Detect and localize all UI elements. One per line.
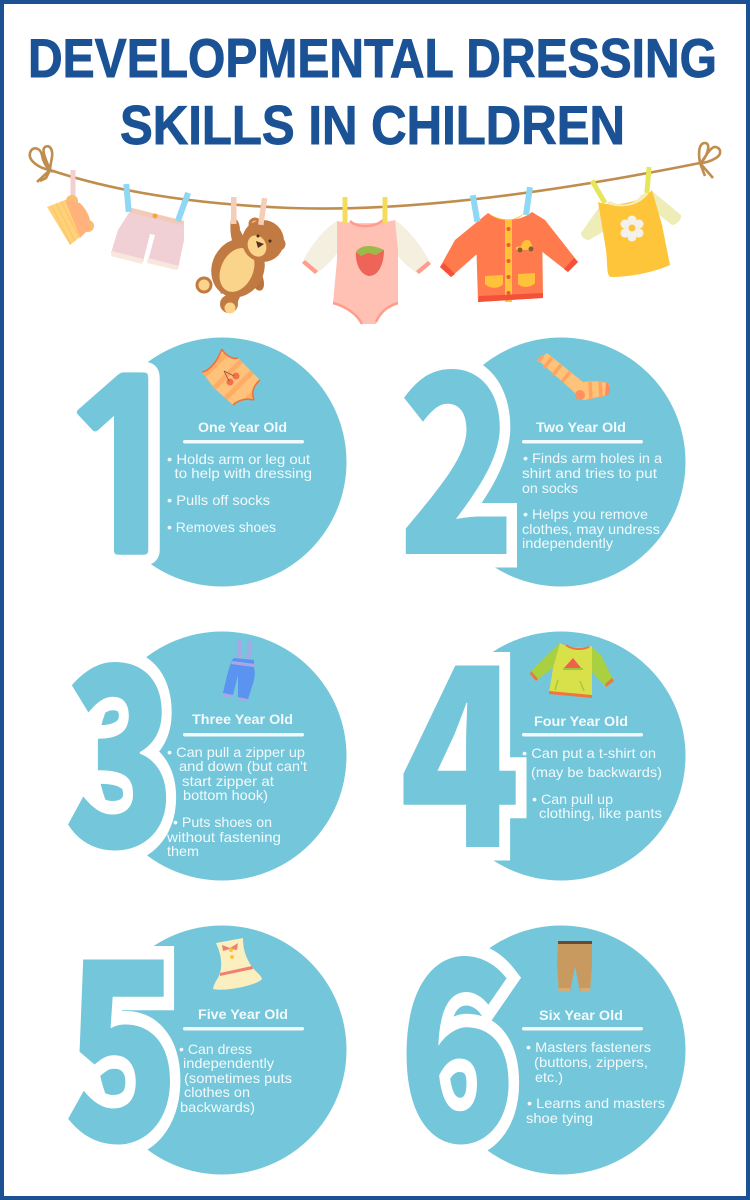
icon: cherry onesie [202, 348, 260, 406]
age heading: Four Year Old [534, 713, 628, 729]
skills list: clothes on [184, 1084, 250, 1100]
skills list: clothing, like pants [539, 805, 662, 821]
skills list: • Helps you remove [523, 506, 648, 522]
skills list: shoe tying [526, 1110, 593, 1126]
strawberry onesie [302, 197, 431, 324]
panel: three year old [64, 558, 346, 920]
skills list: independently [522, 535, 613, 551]
divider [183, 1027, 304, 1030]
skills list [526, 1039, 665, 1126]
title: SKILLS IN CHILDREN [120, 94, 625, 156]
right knot [699, 143, 720, 178]
skills list: shirt and tries to put [522, 465, 657, 481]
skills list: without fastening [166, 829, 281, 845]
skills list [522, 745, 662, 821]
age heading: One Year Old [198, 419, 287, 435]
skills list: • Puts shoes on [173, 814, 272, 830]
skills list [166, 744, 307, 859]
skills list: clothes, may undress [522, 521, 660, 537]
title [28, 27, 717, 156]
skills list: • Can dress [179, 1041, 252, 1057]
skills list: • Holds arm or leg out [167, 451, 310, 467]
divider [522, 733, 643, 736]
skills list: • Masters fasteners [526, 1039, 651, 1055]
skills list: on socks [522, 480, 578, 496]
age heading: Three Year Old [192, 711, 293, 727]
rope [50, 163, 700, 209]
skills list: • Can pull a zipper up [167, 744, 305, 760]
panel: six year old [398, 851, 686, 1200]
icon: watermelon sweatshirt [530, 643, 614, 698]
skills list: • Learns and masters [527, 1095, 665, 1111]
skills list: to help with dressing [174, 465, 312, 481]
number 2: 2 [398, 264, 516, 626]
skills list: • Removes shoes [167, 519, 276, 535]
skills list: bottom hook) [183, 787, 268, 803]
skills list: • Finds arm holes in a [523, 450, 662, 466]
skills list: (may be backwards) [531, 764, 662, 780]
skills list: etc.) [535, 1069, 563, 1085]
skills list: • Pulls off socks [167, 492, 270, 508]
clothesline illustration [30, 143, 720, 324]
skills list: them [167, 843, 199, 859]
skills list: • Can put a t-shirt on [522, 745, 656, 761]
orange cardigan [440, 187, 578, 302]
skills list: • Can pull up [532, 791, 613, 807]
skills list [167, 451, 312, 535]
panel: five year old [63, 852, 346, 1200]
shorts [111, 184, 191, 270]
hat [47, 170, 94, 247]
left knot [30, 146, 52, 182]
skills list: start zipper at [182, 773, 274, 789]
teddy bear [196, 197, 286, 314]
divider [183, 440, 304, 444]
icon: brown pants [557, 941, 592, 992]
panel: two year old [398, 264, 686, 626]
number 1: 1 [50, 353, 202, 588]
age heading: Five Year Old [198, 1006, 288, 1022]
panel: four year old [399, 558, 686, 920]
skills list [179, 1041, 292, 1115]
divider [183, 733, 304, 736]
skills list: backwards) [180, 1099, 255, 1115]
age heading: Two Year Old [536, 419, 626, 435]
skills list [522, 450, 662, 551]
skills list: (buttons, zippers, [534, 1054, 648, 1070]
number 3: 3 [64, 558, 176, 920]
divider [522, 440, 643, 444]
icon: blue overalls [222, 640, 255, 701]
icon: cream dress [213, 938, 262, 990]
panel: one year old [50, 338, 346, 588]
yellow flower shirt [581, 167, 681, 277]
skills list: and down (but can't [179, 758, 307, 774]
age heading: Six Year Old [539, 1007, 623, 1023]
icon: striped sock [538, 353, 610, 400]
skills list: (sometimes puts [184, 1070, 292, 1086]
skills list: independently [183, 1055, 274, 1071]
number 4: 4 [399, 558, 521, 920]
divider [522, 1027, 643, 1030]
